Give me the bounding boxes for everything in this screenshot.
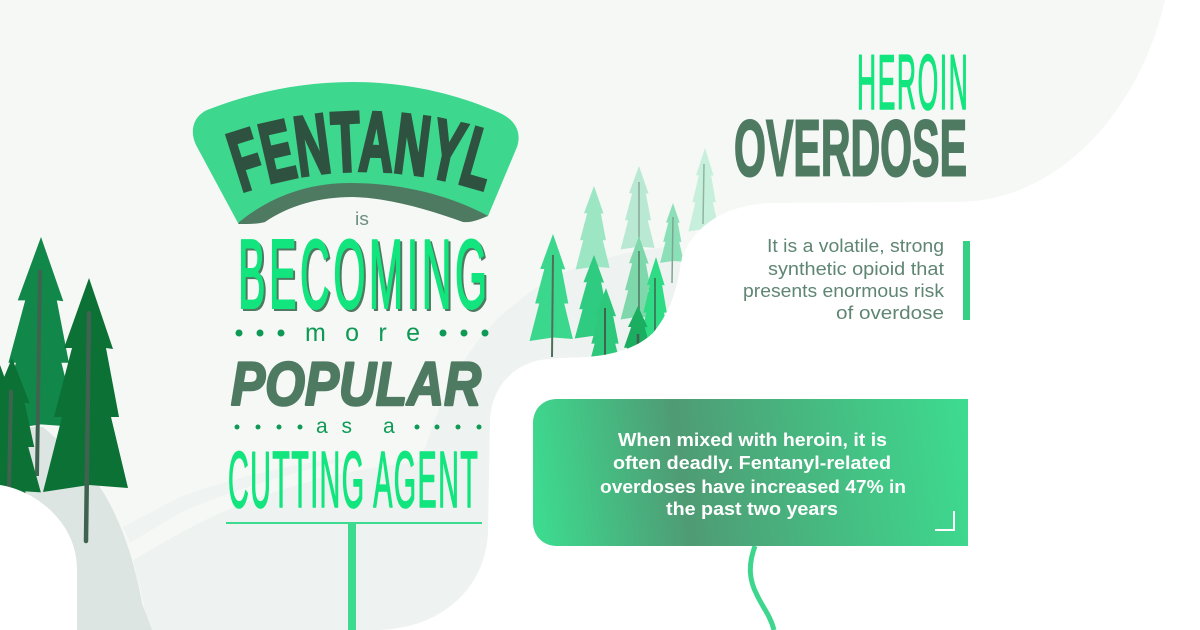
callout text: When mixed with heroin, it is bbox=[618, 429, 887, 450]
corner mark bbox=[935, 511, 954, 530]
back forest trees bbox=[530, 148, 719, 374]
CUTTING AGENT: CUTTING AGENT bbox=[228, 435, 478, 524]
white curved content area bbox=[380, 0, 1200, 630]
left trees bbox=[0, 237, 128, 630]
as a row bbox=[234, 415, 482, 438]
tree bbox=[0, 358, 41, 495]
tree bbox=[639, 257, 670, 343]
POPULAR: POPULAR bbox=[231, 350, 481, 418]
callout text: the past two years bbox=[666, 498, 838, 519]
FENTANYL: FENTANYL bbox=[224, 110, 488, 193]
callout text bbox=[600, 429, 906, 519]
is: is bbox=[355, 209, 369, 229]
HEROIN: HEROIN bbox=[857, 39, 968, 126]
OVERDOSE: OVERDOSE bbox=[734, 104, 967, 192]
banner shadow bbox=[238, 180, 488, 224]
as a row: a bbox=[383, 415, 395, 438]
description: synthetic opioid that bbox=[768, 259, 944, 279]
BECOMING: BECOMING bbox=[240, 221, 489, 331]
callout box bbox=[533, 399, 968, 546]
tree bbox=[660, 203, 684, 283]
sign post bbox=[226, 522, 482, 630]
description bbox=[743, 236, 945, 323]
BECOMING: BECOMING bbox=[238, 219, 487, 329]
callout text: overdoses have increased 47% in bbox=[600, 476, 906, 497]
banner face bbox=[193, 82, 519, 223]
tree bbox=[43, 278, 128, 541]
banner bbox=[192, 82, 519, 224]
tree bbox=[575, 255, 610, 338]
accent bar bbox=[963, 241, 970, 320]
tree bbox=[587, 288, 622, 374]
description: of overdose bbox=[836, 303, 944, 323]
stem bbox=[750, 546, 774, 630]
hills bbox=[0, 245, 680, 630]
tree bbox=[621, 166, 655, 250]
more row bbox=[236, 319, 488, 347]
description: presents enormous risk bbox=[743, 281, 945, 301]
tree bbox=[620, 306, 654, 370]
tree bbox=[0, 365, 27, 502]
tree bbox=[0, 237, 77, 476]
callout text: often deadly. Fentanyl-related bbox=[613, 452, 891, 473]
white snow blob bbox=[0, 485, 77, 630]
tree bbox=[576, 186, 610, 269]
tree bbox=[688, 148, 719, 231]
tree bbox=[530, 234, 573, 357]
more row: more bbox=[305, 319, 420, 347]
tree bbox=[621, 236, 655, 322]
as a row: as bbox=[316, 415, 352, 438]
description: It is a volatile, strong bbox=[767, 236, 944, 256]
